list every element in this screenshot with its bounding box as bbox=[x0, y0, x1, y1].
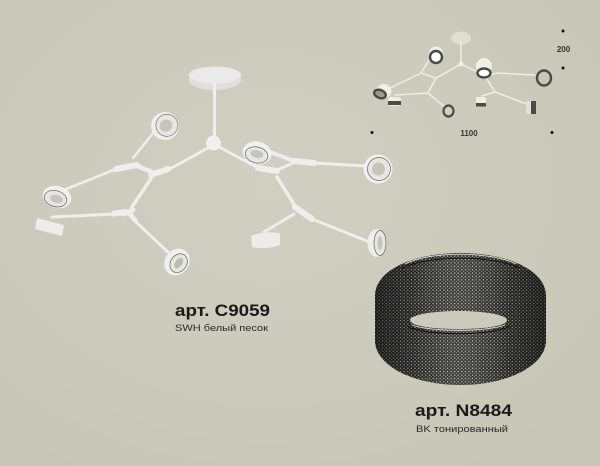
dimension marks bbox=[370, 30, 564, 134]
ceiling canopy bbox=[189, 66, 241, 90]
article number: арт. N8484 bbox=[415, 401, 513, 420]
ring body bbox=[375, 253, 546, 385]
ring highlights bbox=[402, 254, 520, 334]
lamp: bottom left bbox=[159, 244, 195, 280]
lamp: far right upper bbox=[364, 154, 392, 184]
finish: SWH белый песок bbox=[175, 323, 269, 334]
lamp: lower left cylinder bbox=[35, 218, 64, 236]
mini canopy bbox=[451, 32, 471, 44]
mini arms bbox=[388, 42, 535, 108]
central joint bbox=[206, 136, 221, 150]
lamp: mid left bbox=[40, 183, 74, 211]
ring shading bbox=[375, 253, 546, 385]
mini joint bbox=[458, 62, 464, 66]
dimension: width: 1100 bbox=[460, 129, 478, 138]
label: N8484 bbox=[415, 401, 513, 435]
label: C9059 bbox=[175, 301, 270, 334]
finish: BK тонированный bbox=[416, 424, 508, 435]
article number: арт. C9059 bbox=[175, 301, 270, 320]
lamp: far right lower bbox=[368, 229, 386, 257]
lamp: upper left bbox=[147, 108, 183, 144]
arms bbox=[52, 85, 367, 254]
lamp: centre right bbox=[240, 139, 274, 167]
mini dimension drawing bbox=[370, 30, 571, 138]
crystal ring bbox=[375, 253, 546, 385]
mini lamps bbox=[373, 46, 551, 116]
dimension: height: 200 bbox=[557, 45, 571, 54]
main chandelier illustration bbox=[35, 66, 392, 280]
lamp: lower right cylinder bbox=[251, 232, 280, 248]
